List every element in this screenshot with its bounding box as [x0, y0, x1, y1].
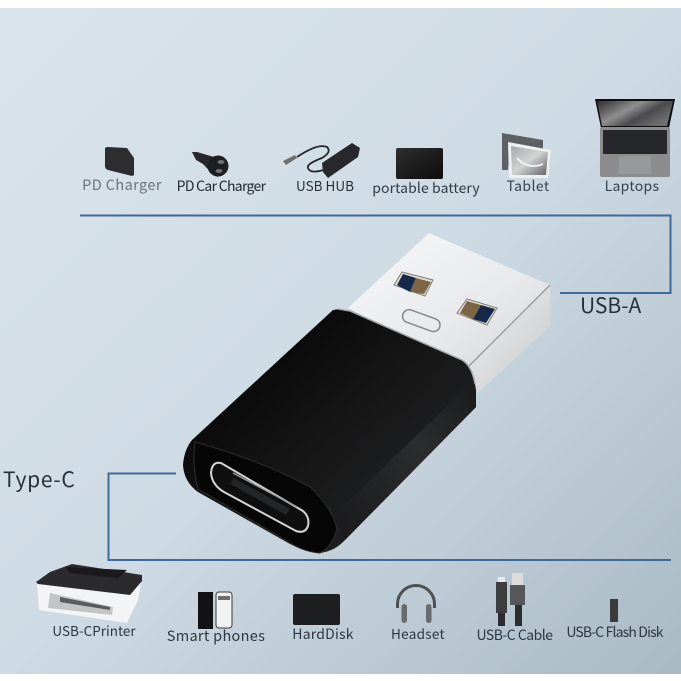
- bottom device row: [36, 564, 664, 646]
- device: USB-C Printer: [36, 564, 142, 640]
- device: PD Charger: [82, 147, 162, 195]
- device: USB-C Printer: USB-CPrinter: [52, 620, 136, 640]
- device: PD Car Charger: PD Car Charger: [177, 176, 267, 196]
- connector line: Type-C: [108, 474, 671, 560]
- USB-A plug top face: [348, 233, 550, 368]
- device: PD Car Charger: [177, 152, 267, 196]
- device: PD Charger: PD Charger: [82, 174, 162, 195]
- device: USB HUB: [283, 143, 360, 195]
- label: Type-C: Type-C: [3, 464, 76, 494]
- label: USB-A: USB-A: [580, 290, 642, 320]
- device: Laptops: Laptops: [605, 176, 660, 196]
- body edge reflection band: [337, 382, 476, 540]
- Type-C port: [211, 463, 308, 532]
- USB-A right contact window: [457, 299, 497, 325]
- device: Laptops: [595, 99, 675, 196]
- Type-C port tongue: [233, 473, 297, 507]
- device: HardDisk: [292, 594, 354, 644]
- device: USB-C Flash Disk: [566, 599, 664, 642]
- black adapter body: [183, 309, 476, 553]
- device: Smart phones: [167, 592, 265, 646]
- device: USB-C Cable: [476, 573, 553, 645]
- top device row: [82, 99, 675, 198]
- device: portable battery: portable battery: [372, 178, 480, 198]
- device: Tablet: [502, 133, 551, 196]
- device: Headset: Headset: [391, 623, 445, 643]
- device: HardDisk: HardDisk: [292, 624, 354, 644]
- device: Headset: [391, 586, 445, 643]
- device: USB HUB: USB HUB: [296, 175, 354, 195]
- USB-A oval dimple: [401, 308, 442, 333]
- device: USB-C Flash Disk: USB-C Flash Disk: [566, 622, 664, 642]
- connector line: USB-A: [80, 216, 670, 293]
- device: Smart phones: Smart phones: [167, 625, 265, 646]
- USB-A plug side face: [467, 285, 551, 393]
- device: Tablet: Tablet: [506, 176, 550, 196]
- adapter illustration: [183, 233, 551, 553]
- device: USB-C Cable: USB-C Cable: [476, 625, 553, 645]
- Type-C end face: [194, 442, 337, 553]
- device: portable battery: [372, 148, 480, 198]
- USB-A left contact window: [394, 272, 433, 296]
